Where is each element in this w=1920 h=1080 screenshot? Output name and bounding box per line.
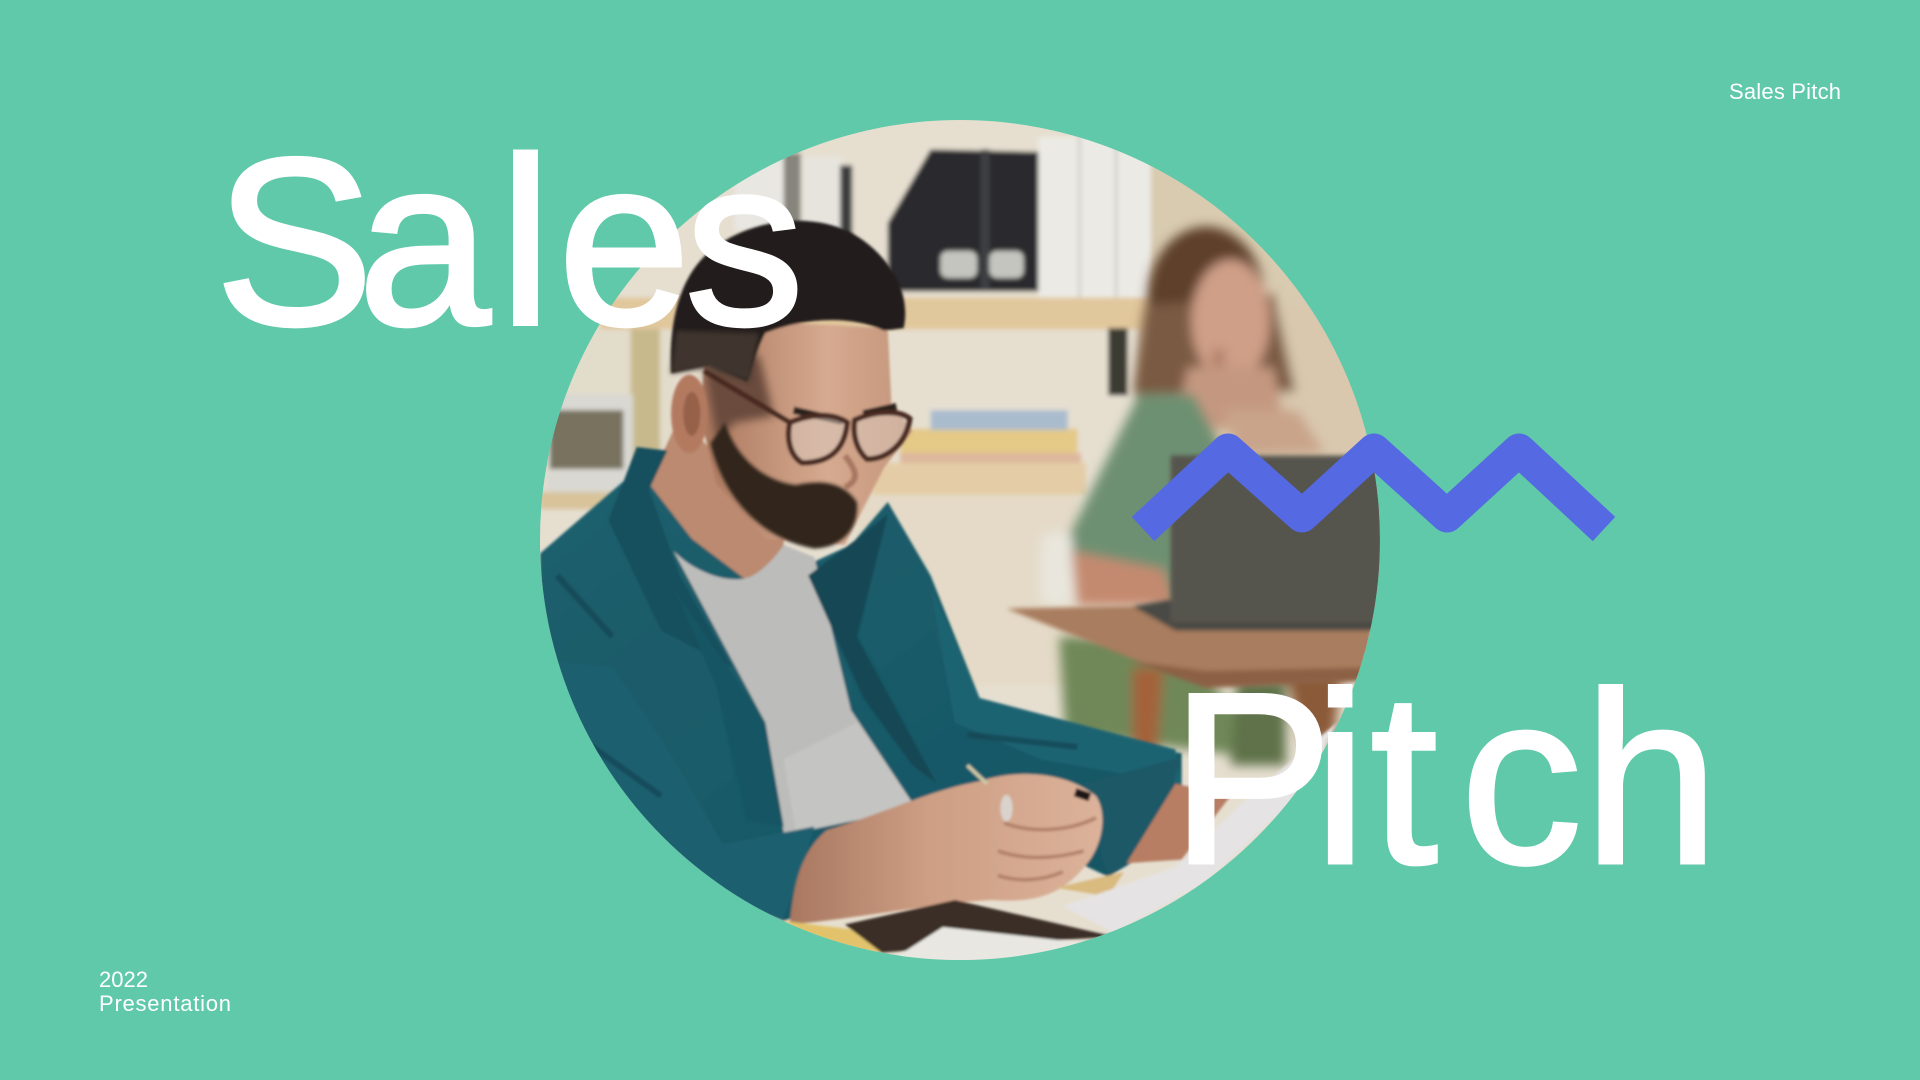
hair — [671, 221, 905, 382]
footer label — [99, 967, 231, 1016]
zigzag line icon — [1143, 450, 1604, 529]
man — [540, 221, 1337, 967]
jacket body — [540, 447, 1182, 921]
ear — [671, 375, 708, 453]
t-shirt — [673, 545, 916, 833]
far arm — [1127, 784, 1231, 863]
title word: Pitch: Pitch — [1170, 641, 1719, 915]
face — [700, 321, 912, 545]
desk items — [784, 921, 882, 953]
laptop and table — [1007, 456, 1384, 688]
desk behind paper — [1056, 872, 1124, 896]
paper — [1063, 722, 1337, 933]
side stubble — [704, 355, 774, 441]
cuff — [1128, 760, 1178, 781]
eyebrows and nose shading — [793, 407, 896, 421]
neck — [648, 431, 786, 580]
sleeve fold — [762, 825, 816, 916]
forearm and hand — [790, 774, 1102, 924]
glasses — [704, 371, 910, 463]
ring — [1000, 795, 1013, 822]
office background — [527, 110, 1396, 967]
footer label: Presentation — [99, 991, 231, 1016]
title word: Sales: Sales — [215, 110, 804, 375]
colleague in background — [1041, 227, 1390, 765]
photo: man and colleague at desk — [527, 110, 1396, 967]
collar and placket — [609, 447, 732, 667]
header label: Sales Pitch — [1729, 79, 1841, 104]
beard — [710, 422, 857, 549]
pen — [967, 765, 987, 784]
footer label: 2022 — [99, 967, 148, 992]
